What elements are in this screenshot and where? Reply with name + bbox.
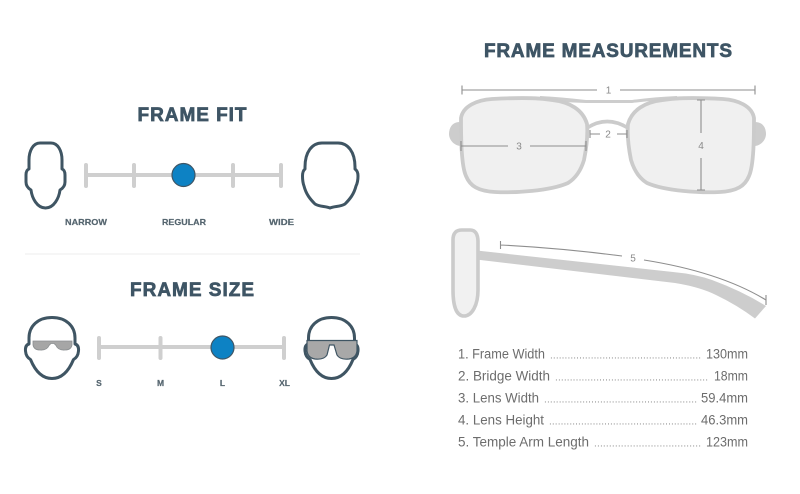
row: lens height: 4. Lens Height [458, 412, 544, 428]
top bar [540, 96, 678, 103]
label: L: L [220, 378, 225, 388]
panel: frame fit [26, 105, 358, 227]
row: temple arm length: 123mm [706, 434, 748, 450]
row: temple arm length [458, 434, 748, 450]
row: lens width: 59.4mm [701, 390, 748, 406]
row: lens width: .................................................... [544, 394, 697, 406]
row: bridge width: 18mm [714, 368, 748, 384]
row: lens height: ................................................... [549, 416, 697, 428]
right lens [628, 98, 754, 192]
row: bridge width: .................................................... [555, 372, 708, 384]
dimension 4: lens height [697, 100, 705, 190]
heading: frame size: FRAME SIZE [130, 280, 254, 301]
row: lens width [458, 390, 748, 406]
dimension 5: temple arm length [500, 241, 766, 305]
row: lens height [458, 412, 748, 428]
row: lens width: 3. Lens Width [458, 390, 539, 406]
row: temple arm length: .................................... [594, 438, 701, 450]
label: wide: WIDE [269, 217, 294, 227]
dimension 2: bridge width: 2 [605, 130, 611, 140]
row: bridge width [458, 368, 748, 384]
dimension 1: frame width [462, 86, 755, 96]
label: regular: REGULAR [162, 217, 206, 227]
icon: narrow face [26, 143, 65, 208]
row: lens height: 46.3mm [701, 412, 748, 428]
dimension 2: bridge width [590, 130, 627, 140]
right temple stub [755, 122, 766, 146]
icon: large face with large glasses [305, 318, 358, 378]
label: XL: XL [279, 378, 290, 388]
bridge [587, 122, 628, 128]
marker: L [211, 336, 234, 359]
icon: wide face [302, 143, 358, 208]
temple arm [472, 250, 766, 318]
diagram: glasses front view [449, 86, 766, 192]
label: S: S [96, 378, 102, 388]
icon: small face with small glasses [25, 318, 79, 378]
dimension 3: lens width [461, 141, 586, 152]
label: narrow: NARROW [65, 217, 108, 227]
lens side [453, 230, 478, 316]
dimension 1: frame width: 1 [606, 86, 612, 96]
left lens [461, 98, 587, 192]
fit slider [86, 164, 281, 186]
heading: frame fit: FRAME FIT [138, 105, 247, 126]
dimension 5: temple arm length: 5 [630, 254, 636, 264]
panel: frame measurements [449, 41, 766, 450]
measurements list [458, 346, 748, 450]
row: frame width: 1. Frame Width [458, 346, 545, 362]
row: bridge width: 2. Bridge Width [458, 368, 550, 384]
left temple stub [449, 122, 460, 146]
diagram: glasses side view [453, 230, 766, 318]
marker: regular [172, 164, 195, 186]
dimension 3: lens width: 3 [516, 142, 522, 152]
size slider [99, 336, 284, 359]
row: frame width: .................................................... [550, 350, 701, 362]
row: frame width [458, 346, 748, 362]
dimension 4: lens height: 4 [698, 141, 704, 152]
label: M: M [157, 378, 164, 388]
panel: frame size [25, 280, 358, 388]
row: frame width: 130mm [706, 346, 748, 362]
row: temple arm length: 5. Temple Arm Length [458, 434, 589, 450]
heading: frame measurements: FRAME MEASUREMENTS [484, 41, 732, 62]
